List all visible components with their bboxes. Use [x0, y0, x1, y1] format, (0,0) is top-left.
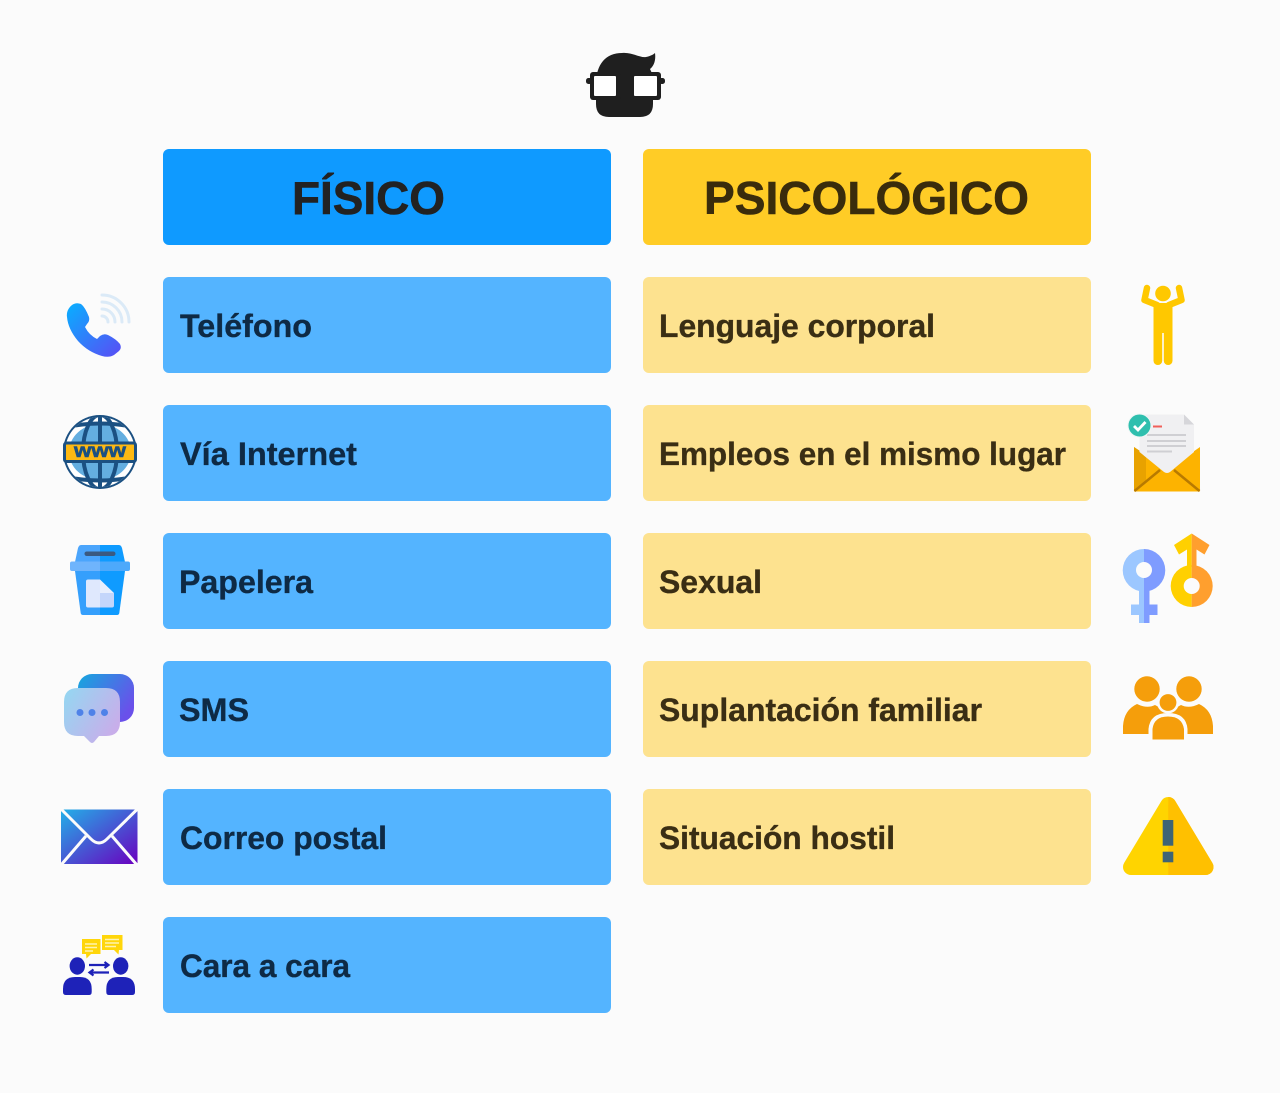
header: FÍSICO: FÍSICO [292, 172, 445, 224]
row: Situación hostil [643, 789, 1091, 885]
row: Sexual [643, 533, 1091, 629]
row: Empleos en el mismo lugar: Empleos en el mismo lugar [659, 436, 1066, 472]
icon: www globe: www [73, 441, 126, 462]
row: Vía Internet: Vía Internet [180, 436, 357, 472]
row: Correo postal [163, 789, 611, 885]
row: Teléfono [163, 277, 611, 373]
row: Cara a cara [163, 917, 611, 1013]
row: Suplantación familiar: Suplantación familiar [659, 692, 982, 728]
icon: two people talking [63, 935, 135, 995]
icon: www globe [63, 415, 137, 489]
row: Suplantación familiar [643, 661, 1091, 757]
row: Papelera: Papelera [179, 564, 313, 600]
header: PSICOLÓGICO [643, 149, 1091, 245]
logo: nerd face with glasses [586, 53, 665, 117]
row: Cara a cara: Cara a cara [180, 948, 350, 984]
row: Teléfono: Teléfono [180, 308, 312, 344]
row: Sexual: Sexual [659, 564, 762, 600]
icon: family group [1123, 676, 1213, 743]
row: Vía Internet [163, 405, 611, 501]
icon: telephone [67, 295, 129, 357]
row: Lenguaje corporal: Lenguaje corporal [659, 308, 935, 344]
row: SMS: SMS [179, 692, 249, 728]
icon: open letter with check [1128, 414, 1200, 492]
row: Papelera [163, 533, 611, 629]
icon: person with arms raised [1144, 286, 1182, 365]
icon: envelope [60, 808, 138, 865]
header: PSICOLÓGICO: PSICOLÓGICO [704, 172, 1029, 224]
icon: warning triangle [1131, 805, 1206, 867]
row: Lenguaje corporal [643, 277, 1091, 373]
row: Empleos en el mismo lugar [643, 405, 1091, 501]
icon: chat bubbles [64, 674, 134, 743]
icon: gender symbols [1123, 534, 1213, 623]
header: FÍSICO [163, 149, 611, 245]
row: SMS [163, 661, 611, 757]
row: Situación hostil: Situación hostil [659, 820, 895, 856]
icon: paper bin [70, 545, 130, 615]
row: Correo postal: Correo postal [180, 820, 387, 856]
